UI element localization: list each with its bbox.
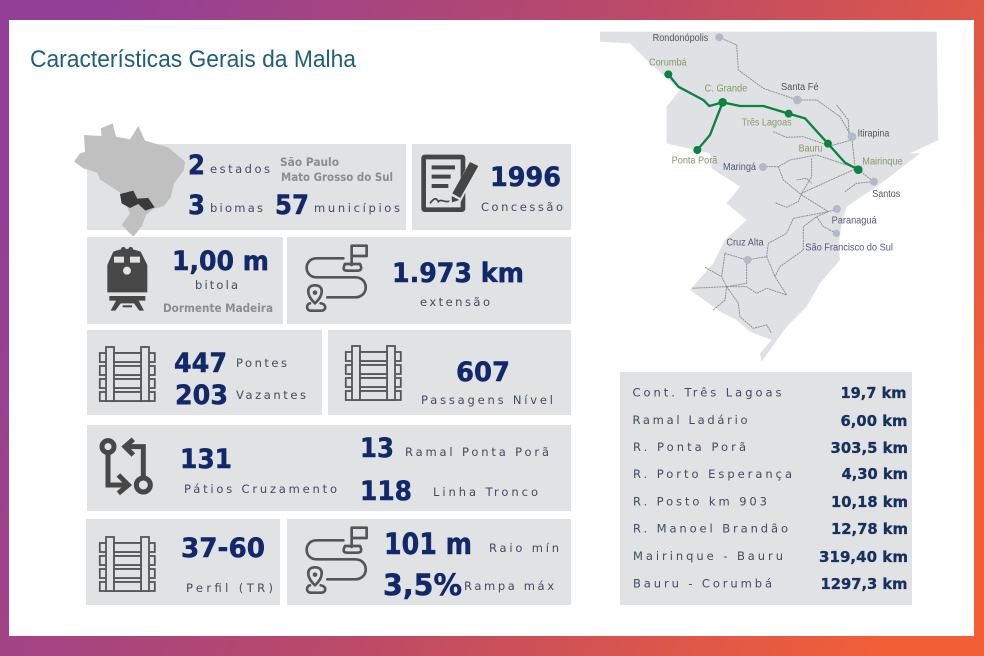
city labels: Maringá	[723, 162, 756, 173]
city labels: Rondonópolis	[653, 33, 708, 44]
panel: passagens de nível	[328, 330, 571, 415]
row: R. Porto Esperança	[633, 465, 908, 483]
row: Bauru - Corumbá: Bauru - Corumbá	[633, 576, 772, 590]
stat: 3,5% Rampa máx: 3,5%	[383, 568, 462, 602]
map: rail network	[600, 32, 938, 362]
green station markers	[664, 70, 863, 174]
stat: 203 Vazantes	[175, 380, 306, 411]
panel: raio e rampa	[287, 519, 571, 605]
row: R. Ponta Porã	[633, 439, 908, 457]
row: Ramal Ladário	[632, 412, 908, 430]
panel: extension table	[620, 372, 912, 605]
row: R. Porto Esperança: R. Porto Esperança	[633, 467, 792, 481]
city labels: Itirapina	[858, 129, 890, 140]
panel: pontes e vazantes	[87, 330, 322, 415]
row: Cont. Três Lagoas: 19,7 km	[840, 384, 906, 402]
row: R. Porto Esperança: 4,30 km	[842, 465, 908, 483]
stat: 3,5% Rampa máx: Rampa máx	[464, 579, 554, 593]
stat: 1,00 m: 1,00 m	[172, 246, 269, 277]
icon: signed document	[424, 157, 480, 210]
row: R. Manoel Brandão: R. Manoel Brandão	[633, 522, 788, 536]
panel: pátios de cruzamento	[87, 425, 571, 511]
city labels: Três Lagoas	[742, 117, 792, 128]
stat: 37-60: 37-60	[181, 533, 265, 564]
land area	[600, 32, 938, 362]
stat: 118 Linha Tronco: Linha Tronco	[433, 485, 538, 499]
stat: 1996: 1996	[490, 162, 561, 193]
city labels: São Francisco do Sul	[805, 242, 893, 253]
row: Ramal Ladário: Ramal Ladário	[632, 413, 748, 427]
stat: 2 estados: 2	[188, 150, 205, 181]
row: R. Manoel Brandão	[633, 520, 908, 538]
icon: locomotive	[107, 247, 147, 311]
label: extensão: extensão	[420, 295, 490, 309]
gray station markers	[715, 33, 878, 264]
title: Características Gerais da Malha	[30, 46, 357, 73]
stat: 118 Linha Tronco: 118	[360, 476, 412, 507]
text: state names: Mato Grosso do Sul	[281, 170, 393, 184]
stat: 3 biomas: 3	[188, 190, 205, 221]
stat: 2 estados: estados	[210, 162, 270, 176]
row: R. Manoel Brandão: 12,78 km	[831, 520, 908, 538]
label: Pátios Cruzamento: Pátios Cruzamento	[184, 482, 337, 496]
stat: 447 Pontes: Pontes	[236, 356, 287, 370]
city labels: C. Grande	[705, 83, 748, 94]
stat: 203 Vazantes: Vazantes	[236, 388, 306, 402]
city labels: Bauru	[799, 144, 823, 155]
row: Mairinque - Bauru	[633, 548, 908, 566]
stat: 2 estados	[188, 150, 270, 181]
stat: 607: 607	[456, 357, 510, 388]
stat: 3 biomas	[188, 190, 263, 221]
label: Perfil (TR): Perfil (TR)	[186, 581, 273, 595]
row: Mairinque - Bauru: Mairinque - Bauru	[633, 549, 783, 563]
city labels: Mairinque	[862, 156, 903, 167]
stat: 101 m Raio mín	[384, 527, 559, 561]
stat: 447 Pontes	[174, 348, 287, 379]
stat: 13 Ramal Ponta Porã: Ramal Ponta Porã	[405, 445, 549, 459]
stat: 203 Vazantes: 203	[175, 380, 228, 411]
stat: 101 m Raio mín: 101 m	[384, 527, 472, 561]
stat: 118 Linha Tronco	[360, 476, 538, 507]
text: state names: São Paulo	[280, 155, 339, 169]
icon: crossing arrows	[102, 439, 150, 493]
row: Ramal Ladário: 6,00 km	[840, 412, 908, 430]
label: Concessão: Concessão	[481, 200, 563, 214]
icon: route with flag and pin	[307, 528, 367, 593]
row: Bauru - Corumbá	[633, 575, 908, 593]
stat: 131: 131	[180, 444, 232, 475]
rail lines	[692, 37, 873, 333]
stat: 57 municípios	[275, 190, 400, 221]
panel: extensão	[287, 237, 571, 324]
stat: 3,5% Rampa máx	[383, 568, 554, 602]
city labels: Paranaguá	[832, 215, 877, 226]
row: R. Posto km 903	[633, 493, 908, 511]
row: R. Posto km 903: 10,18 km	[831, 493, 908, 511]
stat: 13 Ramal Ponta Porã	[360, 433, 549, 464]
city labels: Santa Fé	[781, 82, 819, 93]
stat: 447 Pontes: 447	[174, 348, 227, 379]
stat: 57 municípios: municípios	[314, 201, 400, 215]
stat: 3 biomas: biomas	[210, 201, 263, 215]
row: R. Ponta Porã: R. Ponta Porã	[633, 440, 746, 454]
icon: route with flag and pin	[307, 246, 367, 311]
city labels: Cruz Alta	[726, 237, 764, 248]
city labels	[649, 33, 903, 253]
row: R. Posto km 903: R. Posto km 903	[633, 494, 767, 508]
label: bitola: bitola	[195, 278, 238, 292]
icon: rail track	[100, 347, 155, 401]
icon: map of Brazil	[74, 123, 185, 237]
row: Bauru - Corumbá: 1297,3 km	[820, 575, 908, 593]
label: Passagens Nível: Passagens Nível	[421, 393, 553, 407]
icon: rail track	[100, 537, 155, 591]
stat: 101 m Raio mín: Raio mín	[489, 541, 559, 555]
panel: concessão	[412, 144, 571, 230]
panel: estados, biomas e municípios	[74, 123, 406, 237]
row: Cont. Três Lagoas	[632, 384, 906, 402]
text: state names	[280, 155, 393, 184]
row: R. Ponta Porã: 303,5 km	[830, 439, 908, 457]
row: Mairinque - Bauru: 319,40 km	[819, 548, 908, 566]
city labels: Corumbá	[649, 58, 687, 69]
panel: bitola	[87, 237, 283, 324]
city labels: Ponta Porã	[672, 155, 718, 166]
panel: perfil	[86, 519, 280, 605]
stat: 57 municípios: 57	[275, 190, 309, 221]
icon: rail track	[346, 346, 401, 400]
row: Cont. Três Lagoas: Cont. Três Lagoas	[632, 386, 782, 400]
label: Dormente Madeira: Dormente Madeira	[163, 301, 273, 315]
green main line	[668, 74, 858, 170]
city labels: Santos	[872, 189, 900, 200]
stat: 13 Ramal Ponta Porã: 13	[360, 433, 394, 464]
stat: 1.973 km: 1.973 km	[392, 258, 524, 289]
